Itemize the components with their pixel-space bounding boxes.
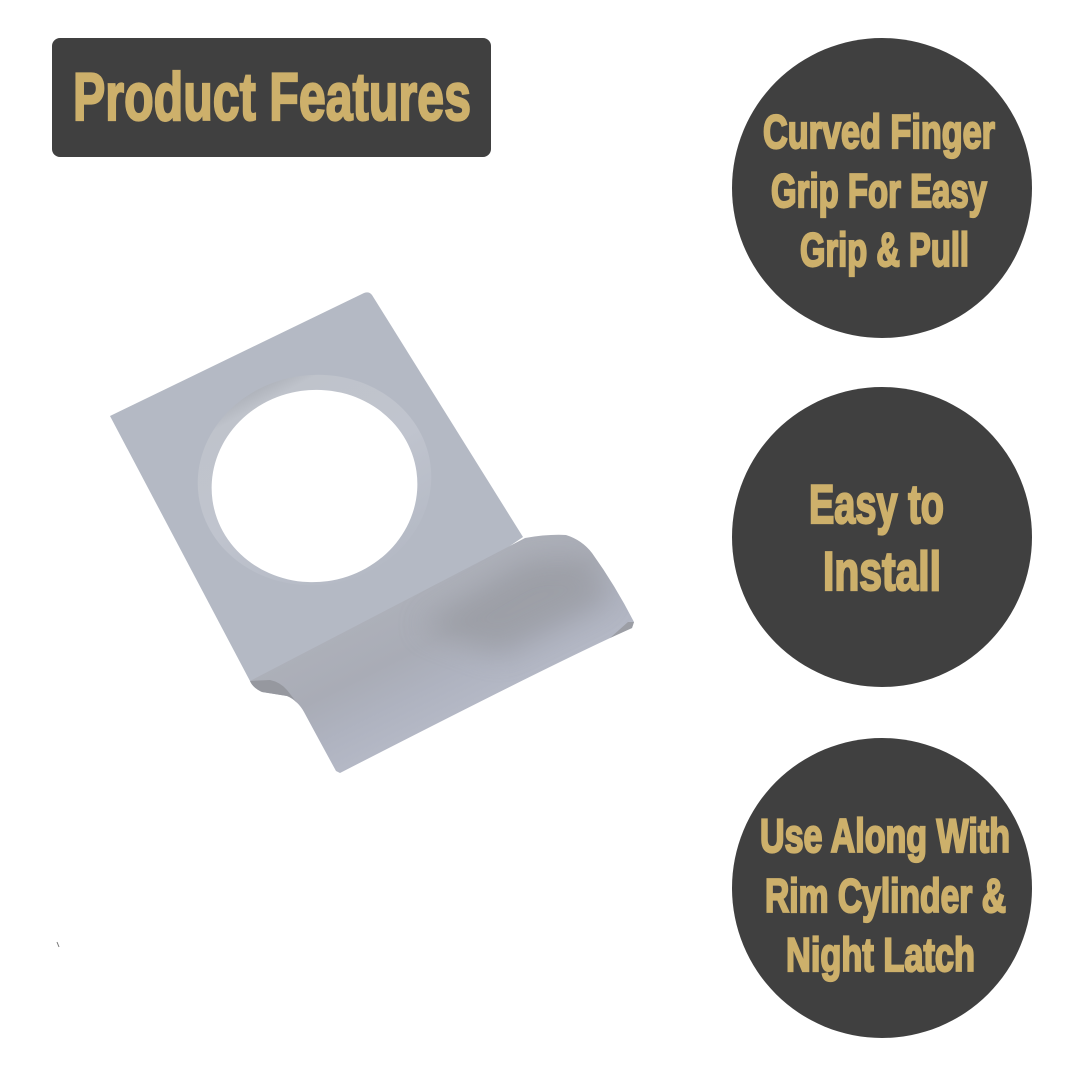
feature circle: use with rim cylinder [732, 738, 1032, 1038]
product image: cylinder pull plate [110, 292, 634, 773]
line 2: Install [823, 541, 941, 602]
title banner [52, 38, 491, 157]
line 1: Easy to [809, 474, 944, 535]
feature circle: curved finger grip [732, 38, 1032, 338]
line 2: Grip For Easy [771, 165, 987, 218]
title text: Product Features [73, 59, 471, 135]
line 3: Night Latch [786, 929, 975, 982]
feature circle: easy to install [732, 387, 1032, 687]
flap tip shadow [610, 622, 634, 638]
flap shading [440, 558, 606, 655]
flap lower edge lip [250, 680, 297, 703]
line 1: Curved Finger [763, 106, 995, 159]
finger grip flap [250, 535, 634, 773]
recessed ring around hole [184, 360, 445, 600]
plate [110, 292, 523, 690]
stray mark [57, 942, 59, 947]
line 3: Grip & Pull [800, 224, 969, 277]
hole [199, 377, 430, 595]
